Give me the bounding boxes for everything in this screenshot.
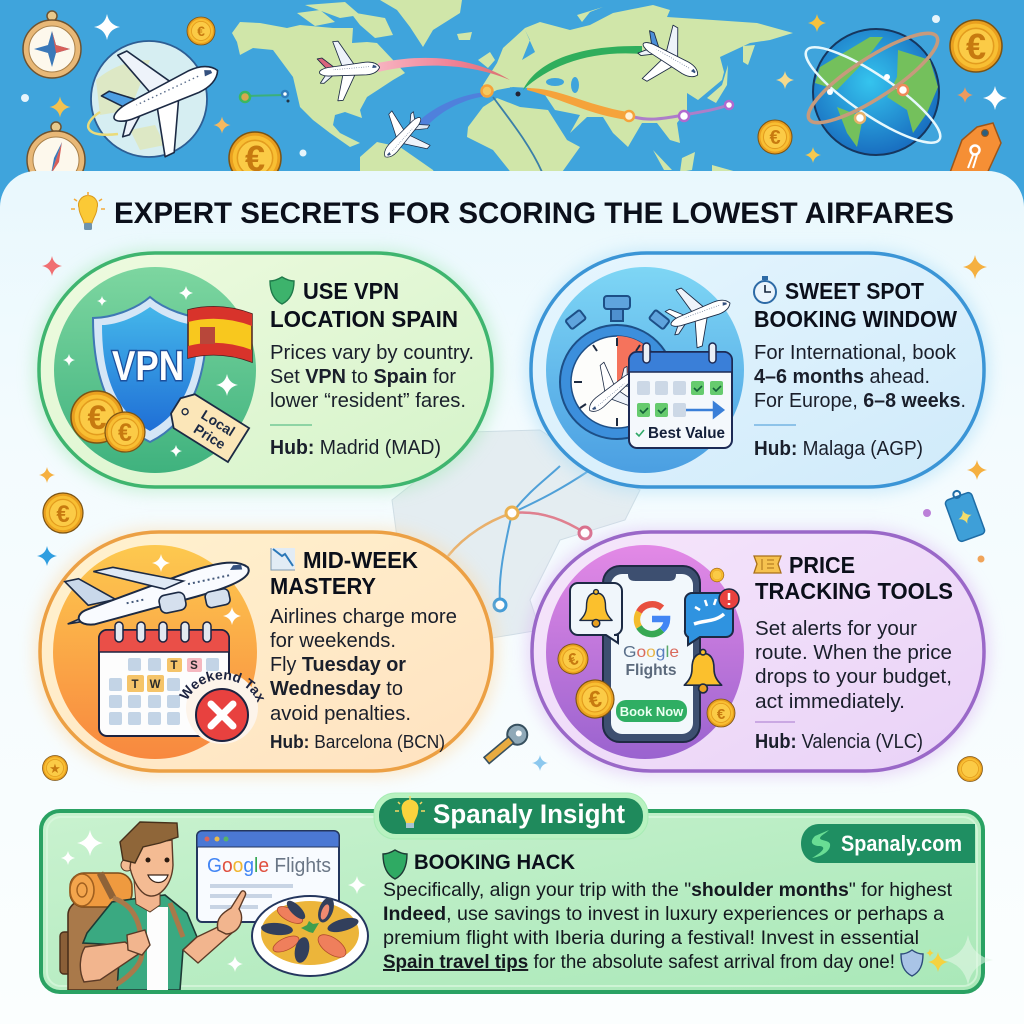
heading	[754, 276, 958, 332]
icon: Google G	[637, 604, 667, 634]
icon: coins: €	[717, 706, 726, 723]
body text: premium flight with Iberia during a festival! Invest in essential	[383, 927, 919, 949]
body text: drops to your budget,	[755, 666, 952, 688]
illustration: browser Google Flights	[197, 831, 339, 922]
body text	[270, 342, 474, 459]
body text: For Europe, 6–8 weeks.	[754, 390, 966, 412]
icon: euro coins	[71, 391, 145, 452]
coin right large	[950, 20, 1002, 72]
icon: light bulb	[71, 192, 105, 230]
icon: weekend calendar	[99, 622, 229, 736]
body text: act immediately.	[755, 691, 905, 713]
icon: local price tag: Price	[191, 421, 229, 452]
body text: Specifically, align your trip with the "shoulder months" for highest	[383, 879, 953, 901]
icon: bell	[684, 649, 722, 693]
icon: coins	[554, 568, 735, 727]
body text: Hub: Valencia (VLC)	[755, 731, 923, 753]
heading: booking hack	[383, 850, 575, 879]
icon: phone with Google Flights	[603, 566, 700, 742]
icon: small shield and sparkles	[901, 949, 948, 976]
airplane south	[384, 110, 430, 158]
right globe	[804, 28, 942, 156]
panel: sweet spot booking window	[531, 253, 984, 487]
coin right small: €	[769, 127, 781, 149]
heading: MID-WEEK	[303, 547, 418, 573]
airplane green route	[637, 24, 698, 82]
heading: USE VPN	[303, 278, 399, 304]
heading: PRICE	[789, 552, 855, 578]
background Spain map with routes	[392, 430, 640, 640]
icon: euro coins: €	[118, 419, 132, 447]
coin small top: €	[197, 23, 205, 39]
heading	[270, 277, 458, 332]
body text: for weekends.	[270, 630, 396, 652]
icon: VPN shield: VPN	[112, 342, 184, 389]
heading	[754, 552, 953, 604]
body text: Spain travel tips for the absolute safest arrival from day one!	[383, 951, 895, 973]
body text: Set alerts for your	[755, 618, 917, 640]
map land	[232, 0, 793, 176]
icon: local price tag: Local	[198, 406, 238, 439]
panel: price tracking tools	[532, 532, 984, 771]
body text: Set VPN to Spain for	[270, 366, 456, 388]
compass bottom	[26, 121, 86, 172]
route nodes	[240, 86, 733, 121]
body text	[755, 618, 952, 753]
icon: bell speech bubble	[570, 583, 622, 643]
icon: euro coins: €	[88, 399, 107, 437]
body text	[754, 342, 966, 460]
heading: SWEET SPOT	[785, 278, 925, 304]
decorative elements around the cards: €	[56, 501, 70, 528]
body text: Hub: Barcelona (BCN)	[270, 732, 445, 752]
body text: Hub: Madrid (MAD)	[270, 437, 441, 459]
illustration: browser Google Flights: Google Flights	[207, 855, 331, 877]
heading: booking hack: BOOKING HACK	[414, 850, 575, 874]
sparkles	[63, 286, 238, 457]
body text	[383, 879, 953, 973]
icon: coins: €	[565, 649, 581, 670]
decorative elements around the cards: ★	[49, 761, 61, 776]
sparkles	[152, 554, 241, 625]
badge: Spanaly.com: Spanaly.com	[841, 831, 962, 856]
card glows	[34, 250, 989, 776]
badge: Spanaly Insight	[374, 793, 648, 839]
body text: lower “resident” fares.	[270, 390, 466, 412]
inland seas	[510, 30, 579, 93]
icon: calendar best value	[629, 343, 732, 448]
icon: Spain flag	[188, 307, 252, 362]
panel: mid-week mastery	[38, 530, 494, 773]
body text: Fly Tuesday or	[270, 654, 406, 676]
airplane pink tail	[316, 38, 382, 102]
body text: Indeed, use savings to invest in luxury experiences or perhaps a	[383, 903, 944, 925]
heading: TRACKING TOOLS	[755, 578, 953, 604]
body text	[270, 606, 457, 752]
icon: calendar best value: Best Value	[648, 425, 725, 442]
icon: weekend tax badge	[178, 672, 264, 744]
icon: phone with Google Flights: Flights	[626, 662, 677, 679]
body text: Wednesday to	[270, 678, 403, 700]
coin bottom	[228, 131, 282, 171]
left globe	[86, 40, 218, 158]
body text: Airlines charge more	[270, 606, 457, 628]
big airplane	[100, 50, 218, 158]
badge: Spanaly.com	[801, 824, 975, 863]
title: EXPERT SECRETS FOR SCORING THE LOWEST AIRFARES	[114, 197, 954, 230]
icon: plane	[659, 274, 741, 354]
icon: airplane taking off	[58, 540, 255, 638]
illustration: traveller with backpack	[60, 822, 246, 990]
body text: Hub: Malaga (AGP)	[754, 438, 923, 460]
icon: weekend calendar: T	[131, 679, 139, 691]
icon: phone with Google Flights: Google	[623, 644, 679, 661]
heading: MASTERY	[270, 573, 376, 599]
panel: use VPN location Spain	[39, 253, 492, 487]
sparkles	[61, 830, 993, 985]
button: book now	[616, 700, 687, 722]
badge: Spanaly Insight: Spanaly Insight	[433, 799, 625, 829]
body text: 4–6 months ahead.	[754, 366, 930, 388]
icon: weekend calendar: S	[190, 660, 198, 672]
body text: For International, book	[754, 342, 957, 364]
flight routes	[246, 46, 728, 172]
heading: LOCATION SPAIN	[270, 306, 458, 332]
panel: Spanaly insight booking hack	[41, 793, 993, 992]
button: book now: Book Now	[620, 704, 684, 719]
decorative elements around the cards	[37, 255, 987, 782]
body text: avoid penalties.	[270, 703, 411, 725]
coin small top	[187, 17, 215, 45]
coin right large: €	[966, 26, 986, 67]
icon: bulb	[395, 796, 425, 828]
icon: alert speech bubble	[685, 589, 739, 645]
body text: Prices vary by country.	[270, 342, 474, 364]
illustration: paella	[252, 895, 368, 976]
icon: weekend calendar: T	[170, 660, 178, 672]
orange price tag	[950, 122, 1002, 171]
body text: route. When the price	[755, 642, 952, 664]
compass top	[23, 11, 81, 78]
header banner: world map	[0, 0, 1024, 215]
heading: BOOKING WINDOW	[754, 306, 958, 332]
icon: weekend calendar: W	[150, 679, 161, 691]
icon: stopwatch	[560, 296, 674, 439]
coin bottom: €	[245, 138, 265, 179]
heading	[270, 547, 418, 599]
icon: local price tag	[165, 389, 249, 462]
icon: weekend tax badge: Weekend Tax	[178, 672, 264, 703]
header sparkles	[21, 14, 1007, 163]
coin right small	[758, 120, 792, 154]
icon: coins: €	[586, 685, 604, 713]
icon: VPN shield	[93, 297, 207, 442]
